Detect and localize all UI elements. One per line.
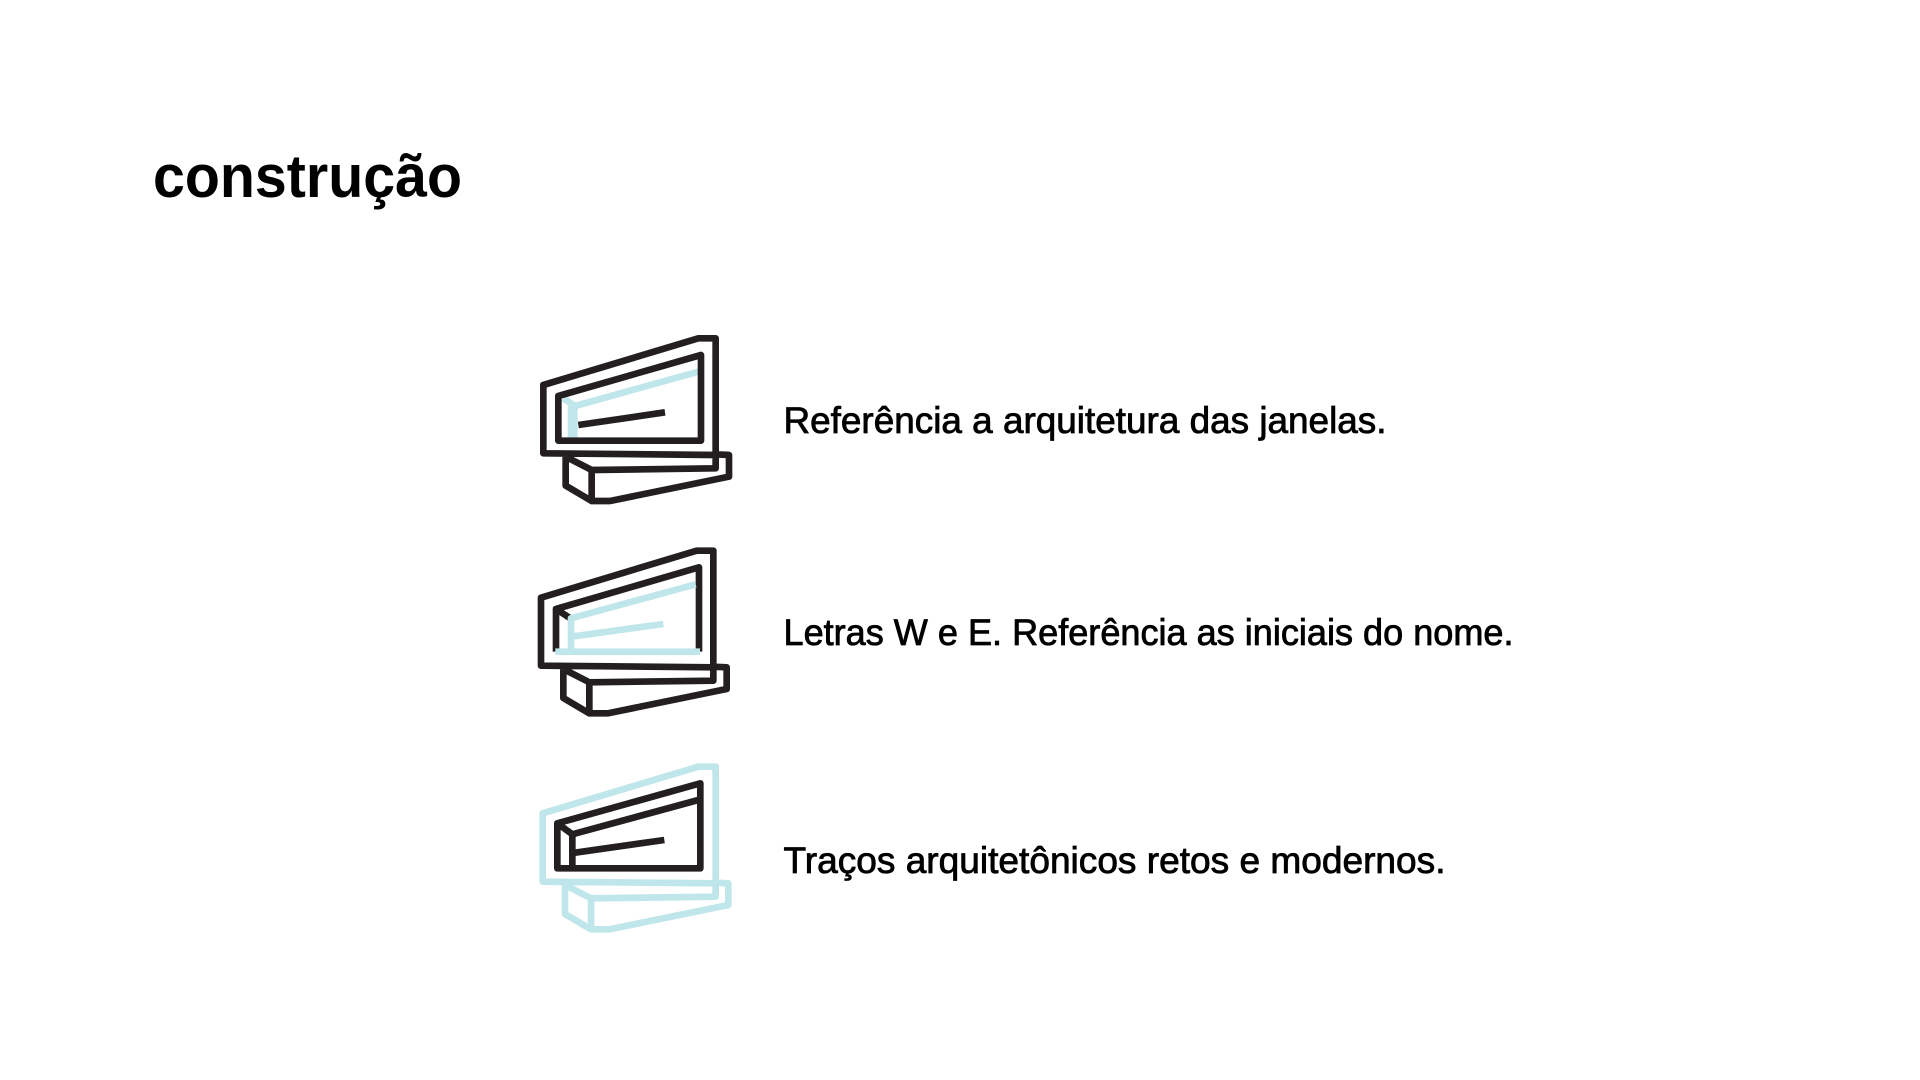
text: straight modern lines: Traços arquitetônicos retos e modernos. xyxy=(784,840,1446,881)
text: reference to windows: Referência a arquitetura das janelas. xyxy=(784,400,1386,441)
title: construção xyxy=(153,143,462,210)
icon: window, letters W and E highlighted xyxy=(541,551,727,713)
icon: window, depth highlighted xyxy=(543,338,729,501)
text: W and E initials: Letras W e E. Referência as iniciais do nome. xyxy=(784,612,1514,653)
icon: window, straight inner lines highlighted xyxy=(543,767,728,929)
